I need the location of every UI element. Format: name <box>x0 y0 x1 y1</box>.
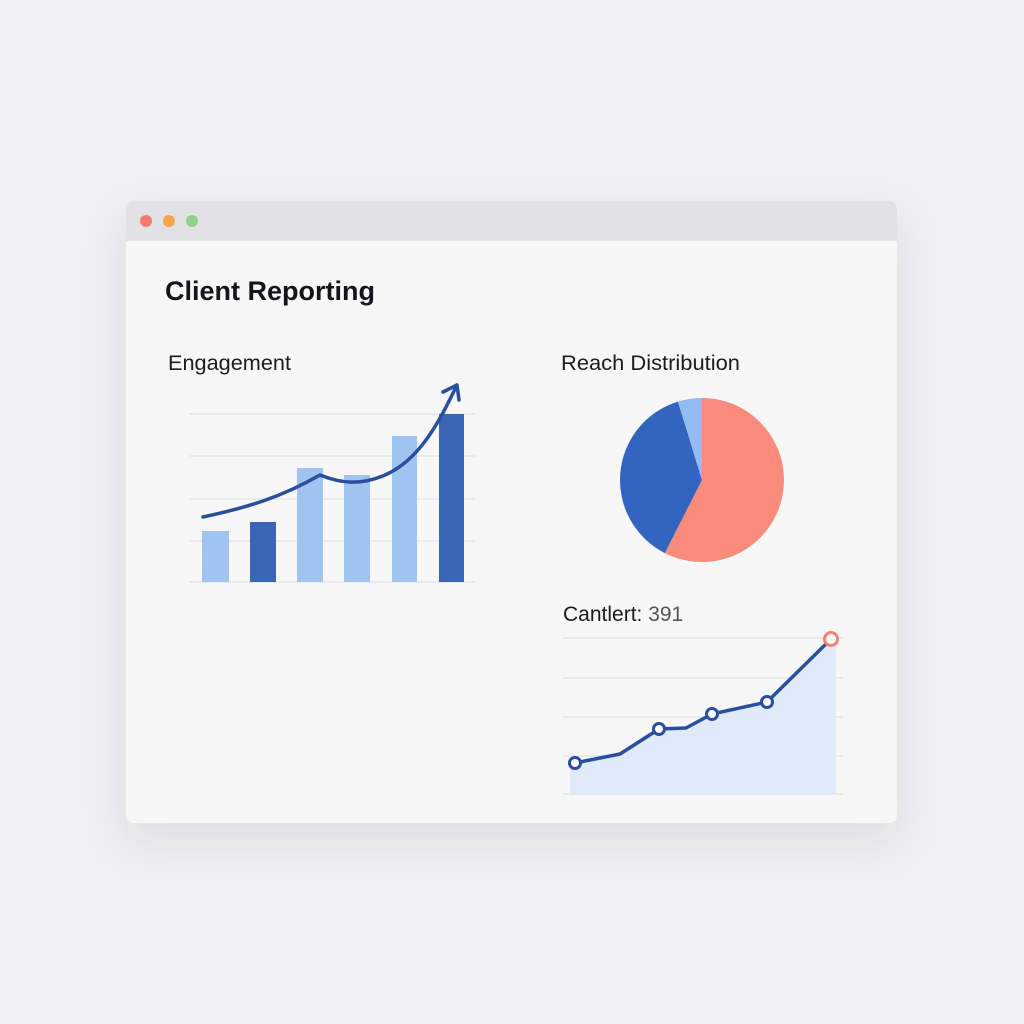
title bar <box>126 201 897 241</box>
browser window <box>126 201 897 823</box>
heading: engagement: Engagement <box>168 352 291 375</box>
title: Client Reporting <box>165 276 375 306</box>
bar chart: engagement <box>190 385 475 582</box>
label: cantlert value: Cantlert: 391 <box>563 603 683 626</box>
pie chart <box>620 398 784 562</box>
heading: reach distribution: Reach Distribution <box>561 352 740 375</box>
line chart <box>563 632 843 794</box>
arrow: trend curve <box>203 385 459 517</box>
icon: window dots <box>140 215 198 227</box>
